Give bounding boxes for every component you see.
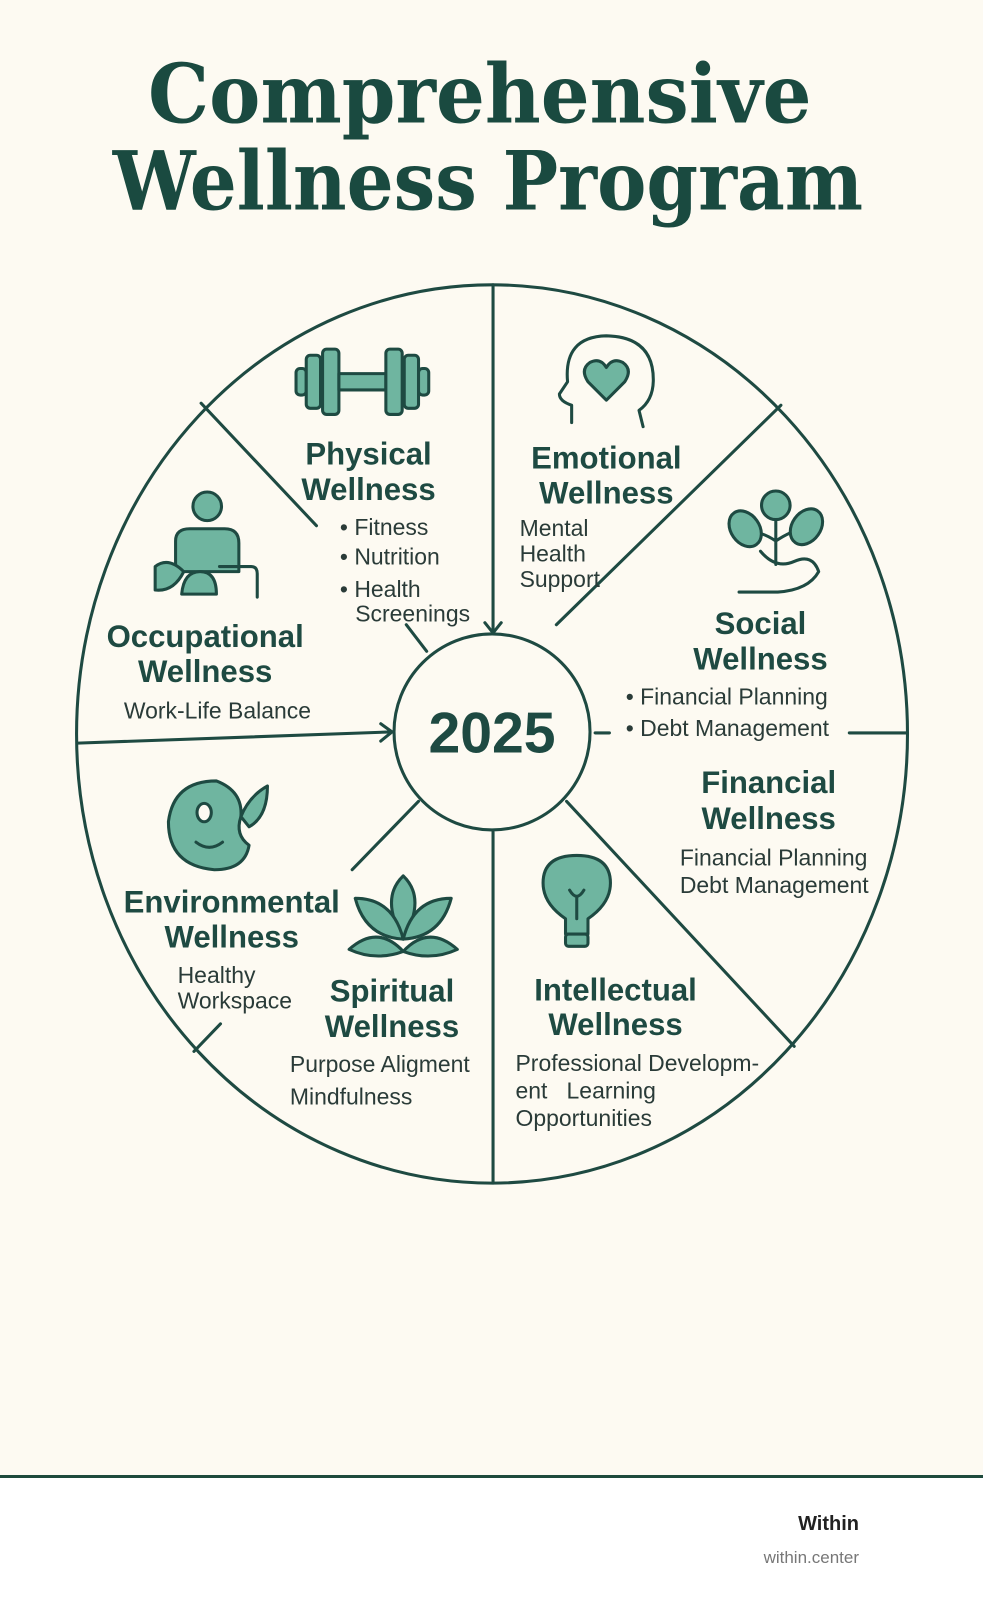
panel: physical wellness: • Health (340, 576, 421, 602)
panel: spiritual wellness (290, 973, 470, 1110)
panel: social wellness: • Debt Management (626, 715, 830, 741)
panel: occupational wellness: Wellness (138, 654, 272, 689)
icon: dumbbell (296, 349, 429, 414)
footer brand: within.center (763, 1548, 859, 1567)
panel: emotional wellness: Emotional (531, 441, 682, 476)
panel: intellectual wellness: Professional Developm- (516, 1050, 759, 1076)
icon: palette (168, 781, 267, 870)
footer brand (763, 1513, 859, 1567)
panel: emotional wellness: Support (520, 566, 601, 592)
panel: financial wellness: Wellness (701, 801, 836, 836)
panel: spiritual wellness: Wellness (325, 1009, 459, 1044)
footer brand: Within (798, 1513, 859, 1535)
panel: financial wellness: Financial (701, 765, 836, 800)
wellness wheel (77, 285, 907, 1183)
panel: physical wellness: Screenings (355, 601, 470, 627)
panel: social wellness: • Financial Planning (626, 683, 828, 709)
panel: emotional wellness: Health (520, 540, 586, 566)
panel: financial wellness: Financial Planning (680, 845, 867, 871)
panel: physical wellness: • Nutrition (340, 544, 440, 570)
icon: plant in hand (722, 491, 829, 592)
panel: intellectual wellness: Wellness (548, 1007, 683, 1042)
panel: emotional wellness (520, 441, 682, 592)
center circle 2025 (394, 634, 590, 830)
panel: social wellness: Social (715, 606, 806, 641)
panel: emotional wellness: Wellness (539, 475, 674, 510)
icon: head with heart (559, 336, 653, 427)
panel: physical wellness: Wellness (301, 472, 436, 507)
panel: intellectual wellness: Opportunities (516, 1105, 652, 1131)
panel: environmental wellness: Workspace (178, 988, 292, 1014)
panel: intellectual wellness: ent Learning (516, 1077, 656, 1103)
panel: environmental wellness (124, 885, 340, 1014)
panel: financial wellness: Debt Management (680, 872, 869, 898)
title: Comprehensive (148, 46, 812, 142)
panel: environmental wellness: Healthy (178, 962, 256, 988)
panel: intellectual wellness (516, 972, 759, 1131)
center circle 2025: 2025 (428, 701, 556, 765)
panel: spiritual wellness: Mindfulness (290, 1084, 412, 1110)
panel: occupational wellness: Occupational (107, 619, 304, 654)
panel: physical wellness: Physical (305, 436, 432, 471)
panel: spiritual wellness: Purpose Aligment (290, 1051, 470, 1077)
panel: financial wellness (680, 765, 869, 898)
icon: lotus (349, 876, 457, 956)
panel: intellectual wellness: Intellectual (534, 972, 697, 1007)
icon: light bulb (543, 855, 610, 946)
panel: occupational wellness (107, 619, 311, 724)
panel: environmental wellness: Environmental (124, 885, 340, 920)
panel: physical wellness (301, 436, 470, 627)
panel: emotional wellness: Mental (520, 515, 588, 541)
panel: occupational wellness: Work-Life Balance (124, 698, 311, 724)
panel: spiritual wellness: Spiritual (330, 973, 454, 1008)
panel: physical wellness: • Fitness (340, 514, 428, 540)
panel: environmental wellness: Wellness (165, 919, 299, 954)
title: Wellness Program (112, 133, 863, 229)
title (112, 46, 863, 229)
panel: social wellness: Wellness (693, 642, 828, 677)
panel: social wellness (626, 606, 830, 741)
icon: person at desk (155, 492, 257, 597)
